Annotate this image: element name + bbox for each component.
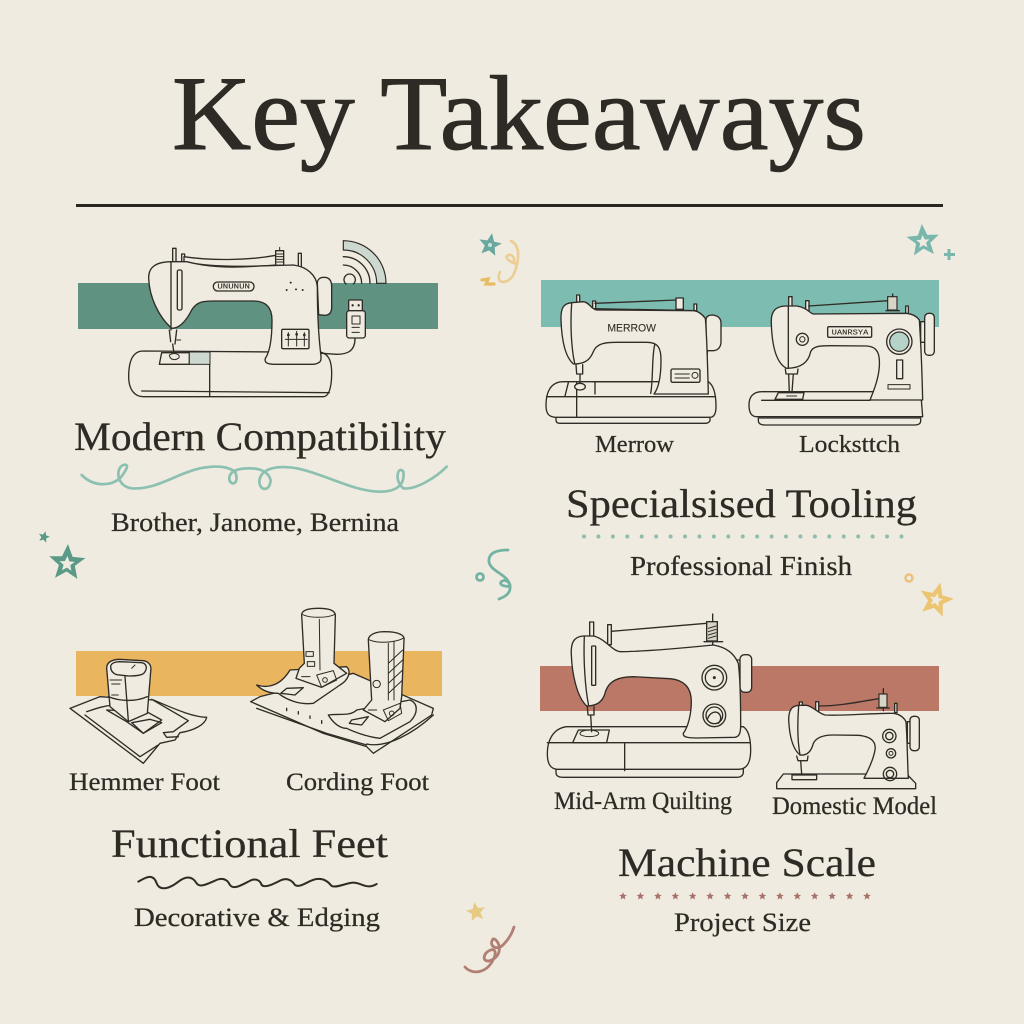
panel: machine scale	[540, 614, 939, 937]
badge text	[213, 282, 254, 291]
subtext: Decorative & Edging	[134, 903, 380, 932]
subtext: Brother, Janome, Bernina	[111, 508, 399, 537]
icon: sewing machine with wifi and usb	[129, 241, 386, 397]
colour band: green	[78, 283, 438, 329]
colour band: yellow	[76, 651, 442, 696]
label: merrow: Merrow	[595, 432, 675, 458]
label: lockstitch: Locksttch	[799, 432, 900, 458]
divider: row of small stars	[619, 892, 871, 900]
colour band: teal	[541, 280, 939, 327]
subtext: Professional Finish	[630, 551, 853, 581]
badge text: MERROW	[607, 323, 656, 335]
divider: dotted	[584, 534, 902, 538]
label: cording foot: Cording Foot	[286, 769, 429, 796]
icon: domestic machine	[777, 689, 919, 789]
subtext: Project Size	[674, 908, 811, 937]
decorations: stars and squiggles	[37, 223, 957, 972]
divider: wavy line	[138, 877, 377, 888]
squiggle: teal centre	[476, 550, 510, 599]
heading: Specialsised Tooling	[566, 481, 917, 526]
star: green left	[37, 530, 86, 579]
icon: lockstitch machine	[749, 294, 934, 425]
icon: wifi	[343, 241, 386, 284]
star: yellow right	[906, 574, 957, 618]
icon: mid-arm quilting machine	[547, 614, 752, 777]
panel: functional feet	[69, 608, 442, 932]
divider: teal loops	[82, 465, 447, 492]
star: teal top right with plus	[906, 223, 955, 260]
heading: Machine Scale	[618, 840, 876, 885]
colour band: terracotta	[540, 666, 939, 711]
icon: merrow machine	[546, 295, 721, 423]
label: domestic model: Domestic Model	[772, 793, 937, 820]
icon: sewing machine with wifi and usb: UNUNUN	[217, 284, 250, 292]
star: teal with orange squiggle	[477, 231, 518, 284]
star and squiggle: bottom centre	[465, 901, 514, 972]
heading: Modern Compatibility	[74, 414, 446, 459]
panel: specialised tooling	[541, 280, 939, 581]
title: Key Takeaways	[172, 55, 866, 172]
panel: modern compatibility	[74, 241, 447, 537]
badge text: UANRSYA	[832, 329, 869, 337]
label: hemmer foot: Hemmer Foot	[69, 769, 220, 796]
label: mid-arm quilting: Mid-Arm Quilting	[554, 788, 732, 815]
heading: Functional Feet	[111, 821, 388, 866]
icon: cording foot	[251, 608, 433, 753]
icon: usb stick	[322, 300, 365, 354]
icon: hemmer foot	[70, 659, 207, 763]
